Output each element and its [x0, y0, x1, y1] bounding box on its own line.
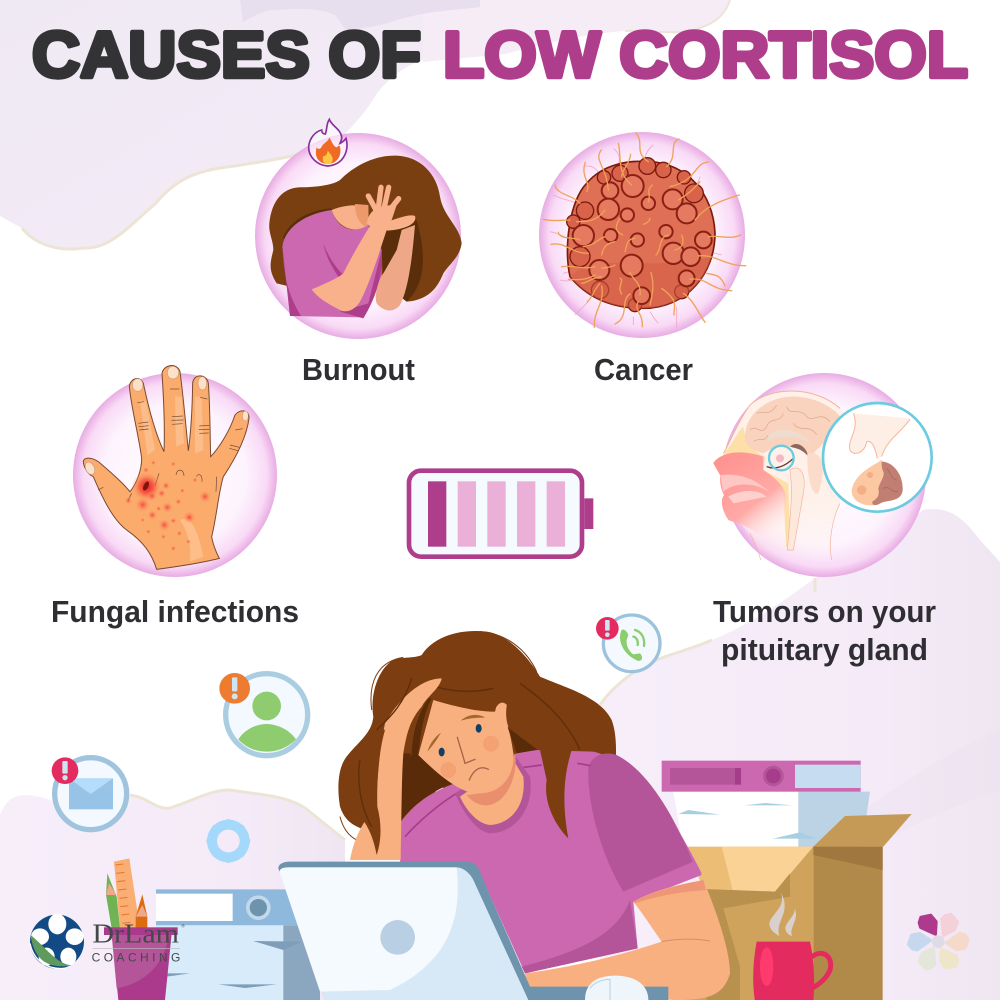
panel: fungal infections: [73, 365, 277, 577]
label: tumors on your pituitary gland: [713, 594, 936, 667]
background: top wash: [0, 0, 730, 249]
flyaway strands: [340, 632, 537, 840]
collar seams: [405, 763, 591, 837]
label: fungal infections: Fungal infections: [51, 594, 299, 629]
ear: [494, 703, 511, 731]
icon: phone alert: [596, 615, 660, 672]
logo mark: [30, 914, 84, 969]
cuff: [623, 862, 702, 902]
label: cancer: Cancer: [594, 352, 693, 387]
label: tumors on your pituitary gland: Tumors on your: [713, 594, 936, 629]
background: bottom wash: [0, 509, 1000, 1000]
cancer bubble: [539, 132, 745, 338]
laptop: [278, 862, 668, 1000]
head cross-section: [713, 391, 932, 560]
binder: [662, 761, 861, 792]
woman at laptop: [278, 631, 730, 1000]
pencil cup: [104, 858, 178, 1000]
cardboard box: [673, 814, 912, 1000]
logo text: [92, 919, 185, 965]
sleeve: [588, 754, 693, 892]
fringe: [393, 662, 496, 757]
face: [418, 700, 513, 793]
icon: faded flower: [906, 912, 971, 971]
neck: [455, 753, 531, 833]
logo: Dr Lam Coaching: [30, 914, 185, 969]
coffee mug: [753, 893, 831, 1000]
steam: [769, 893, 796, 936]
logo text: DrLam: [92, 919, 179, 949]
title: CAUSES OF: [32, 18, 421, 91]
logo text: COACHING: [92, 951, 180, 965]
title: LOW CORTISOL: [443, 18, 968, 91]
icon: person alert: [219, 673, 308, 756]
right desk: binder, papers and box: [662, 761, 912, 1000]
cheeks: [440, 736, 499, 778]
long lock: [506, 683, 572, 838]
panel: cancer: [539, 132, 746, 338]
shirt: [400, 750, 702, 973]
mouse: [585, 976, 648, 1000]
shadowed hair: [387, 727, 540, 820]
back hair: [338, 631, 616, 853]
icon: gear: [206, 819, 250, 863]
burnout bubble: [255, 133, 461, 339]
label: burnout: Burnout: [302, 352, 415, 387]
raised arm: [350, 678, 442, 860]
panel: pituitary tumor: [713, 373, 932, 577]
cancer cell: [543, 133, 746, 328]
papers: [673, 792, 870, 848]
burnout illustration: [269, 156, 462, 318]
lower arm: [525, 880, 730, 1000]
left desk: binder and papers: [156, 889, 320, 1000]
hand with rash: [83, 365, 249, 569]
hair over arm: [343, 727, 385, 855]
logo text: ®: [181, 922, 185, 928]
icon: flame: [309, 119, 347, 166]
eyes and brows: [427, 715, 485, 756]
nose and mouth: [457, 737, 488, 780]
brain bubble: [722, 373, 926, 577]
icon: low battery: [409, 471, 593, 557]
label: tumors on your pituitary gland: pituitary gland: [721, 632, 928, 667]
hand bubble: [73, 373, 277, 577]
title: [32, 18, 968, 91]
panel: burnout: [255, 119, 462, 339]
icon: email alert: [52, 757, 127, 830]
shirt shadow: [522, 900, 638, 973]
hair strand lines: [359, 678, 412, 827]
